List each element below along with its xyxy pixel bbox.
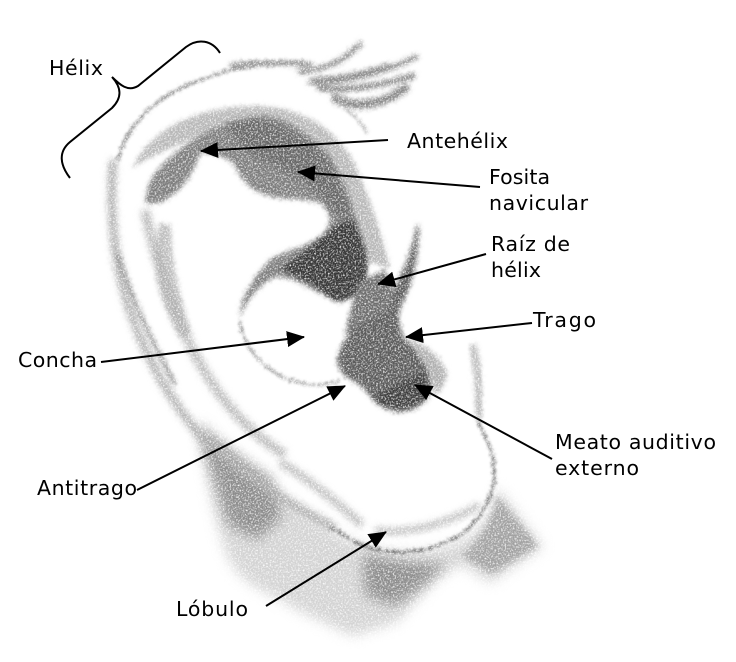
callout: Lóbulo: Lóbulo (176, 597, 248, 621)
shading: left jaw dark patch (197, 425, 282, 540)
callout: Concha (18, 337, 304, 372)
shading: under lobule (363, 553, 447, 606)
tragus outer shading (407, 338, 447, 395)
lobule inner fold (375, 505, 480, 531)
callout: Raíz de hélix: Raíz de (491, 232, 570, 256)
hair strands (300, 44, 416, 104)
concha contour (240, 320, 340, 384)
callout: Raíz de hélix (378, 232, 570, 284)
root of helix shading (345, 270, 397, 335)
shading: neck below ear (200, 420, 543, 636)
lobule right contour (330, 420, 495, 552)
callout: Trago: Trago (532, 308, 596, 332)
patch beside lobule top (472, 345, 480, 418)
fosita navicular dark area (145, 116, 367, 317)
callout: Concha: Concha (18, 348, 97, 372)
outer helix left edge shading (112, 160, 335, 528)
callout: Antehélix (201, 129, 508, 153)
callout: Fosita navicular: Fosita (489, 165, 550, 189)
callout: Antitrago (37, 386, 345, 500)
label: Hélix: Hélix (49, 56, 103, 80)
helix root streak (378, 225, 418, 338)
callout: Meato auditivo externo (415, 385, 716, 480)
inner helix band shading (145, 210, 285, 455)
illustration: pencil drawing of ear (112, 44, 543, 636)
callout: Raíz de hélix: hélix (491, 258, 541, 282)
heading: helix bracket and label (49, 41, 220, 178)
meatus dark lower (373, 372, 425, 407)
callout: Fosita navicular (298, 165, 589, 215)
callout: Meato auditivo externo: Meato auditivo (555, 430, 716, 454)
callout: Antitrago: Antitrago (37, 476, 137, 500)
bracket (62, 41, 220, 178)
shading: right of lobule (462, 495, 538, 574)
antihelix dark core (225, 120, 352, 222)
callout: Trago (406, 308, 596, 337)
outer helix rim top (118, 64, 310, 160)
callout: Fosita navicular: navicular (489, 191, 589, 215)
callout: Lóbulo (176, 532, 386, 621)
antihelix light band (132, 106, 390, 268)
callout: Antehélix: Antehélix (407, 129, 508, 153)
ear canal meatus (337, 300, 431, 412)
callout: Meato auditivo externo: externo (555, 456, 639, 480)
concha dark upper core (280, 220, 367, 300)
